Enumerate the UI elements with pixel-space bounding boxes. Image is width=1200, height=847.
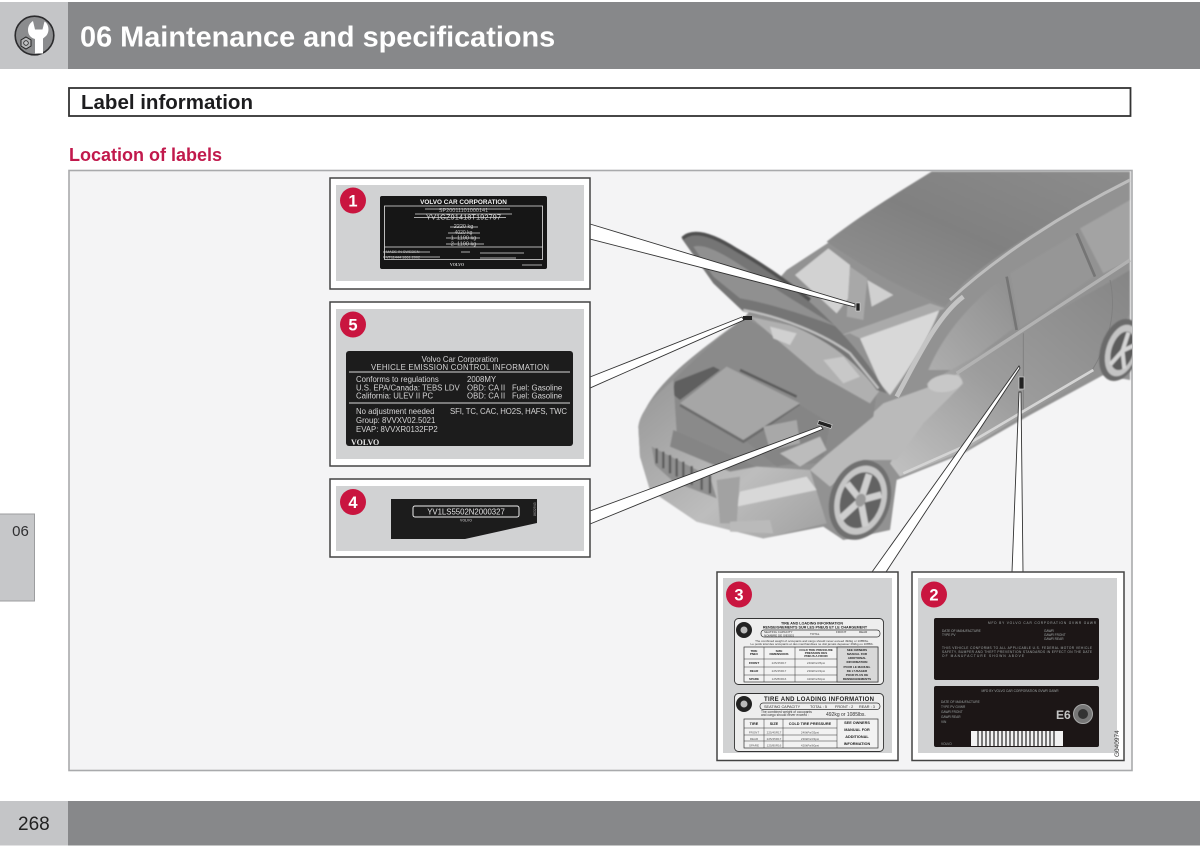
badge 1	[340, 188, 366, 214]
tire label (bilingual): 125/80R16	[772, 677, 787, 681]
vehicle label plate: 2220 kg	[454, 224, 473, 230]
badge 5	[340, 312, 366, 338]
panel: label 3	[717, 572, 898, 760]
page footer band	[0, 801, 1200, 846]
side tab	[0, 514, 34, 601]
badge 5: 5	[348, 316, 358, 334]
VIN plate	[391, 499, 537, 539]
tire label (English): 492kg or 1085lbs.	[826, 712, 866, 718]
badge 4	[340, 489, 366, 515]
side tab: 06	[12, 523, 29, 540]
location marker: label 4	[818, 420, 832, 429]
tire label (bilingual): RENSEIGNEMENTS	[843, 677, 871, 681]
tire label (English): TIRE	[750, 722, 759, 726]
tire label (English): The combined weight of occupants	[761, 710, 812, 714]
illustration code: G040974	[1114, 730, 1121, 757]
VIN plate: VOLVO	[460, 518, 472, 522]
emission label plate: OBD: CA II	[467, 384, 505, 392]
location marker: label 5	[743, 316, 752, 320]
tire label (English): REAR	[750, 737, 759, 741]
tire label (English): 125/80R16	[767, 744, 782, 748]
tire label (bilingual): TOTAL	[810, 632, 820, 636]
car illustration	[638, 172, 1148, 548]
emission label plate: SFI, TC, CAC, HO2S, HAFS, TWC	[450, 407, 567, 416]
barcode plate: MFD BY VOLVO CAR CORPORATION GVWR GAWR	[981, 689, 1059, 693]
certification plate: THIS VEHICLE CONFORMS TO ALL APPLICABLE U.S. FEDERAL MOTOR VEHICLE	[942, 646, 1092, 650]
emission label plate: Group: 8VVXV02.5021	[356, 416, 435, 425]
panel: label 4	[330, 479, 590, 557]
badge 3: 3	[734, 586, 744, 604]
tire label (English): ADDITIONAL	[845, 735, 869, 739]
badge 3	[726, 582, 752, 608]
emission label plate: OBD: CA II	[467, 392, 505, 400]
tire label (bilingual): SEE OWNERS	[847, 648, 867, 652]
emission label plate: EVAP: 8VVXR0132FP2	[356, 425, 438, 434]
tire label (bilingual): SEATING CAPACITY	[764, 630, 793, 634]
barcode plate: E6	[1056, 708, 1071, 722]
tire label (bilingual): SPARE	[749, 677, 759, 681]
tire label (bilingual): DIMENSIONS	[769, 652, 789, 656]
tire label (bilingual): NOMBRE DE SIEGES	[764, 633, 794, 637]
panel: label 1	[330, 178, 590, 289]
vehicle label plate	[380, 196, 547, 269]
tire label (English)	[734, 694, 884, 752]
emission label plate: 2008MY	[467, 375, 497, 384]
tire label (English): SIZE	[770, 722, 779, 726]
tire label (English): 230kPa/33psi	[801, 737, 819, 741]
vehicle label plate: VT11444 1661 2002	[386, 256, 420, 260]
tire label (bilingual): DE L'USAGER	[847, 669, 868, 673]
barcode plate: DATE OF MANUFACTURE	[941, 700, 980, 704]
tire label (bilingual): SIZE	[776, 649, 782, 653]
emission label plate: VOLVO	[351, 438, 379, 447]
leader line: label 2	[1012, 392, 1023, 572]
vehicle label plate: 2- 1190 kg	[451, 242, 476, 248]
certification plate: DATE OF MANUFACTURE	[942, 629, 981, 633]
certification plate	[934, 618, 1099, 680]
tire label (bilingual): The combined weight of occupants and cargo should never exceed 492kg or 1085lbs.	[755, 639, 869, 643]
section heading box: Label information	[81, 91, 253, 114]
tire label (bilingual): TIRE AND LOADING INFORMATION	[781, 622, 843, 626]
icon: wrench and nut	[15, 16, 54, 55]
tire label (English): COLD TIRE PRESSURE	[789, 722, 832, 726]
page header band	[0, 2, 1200, 69]
barcode plate: TYPE PV GVWR	[941, 705, 966, 709]
tire label (English): TOTAL : 5	[810, 705, 827, 709]
vehicle label plate: VOLVO	[450, 262, 464, 267]
tire label (English): SEATING CAPACITY	[764, 705, 801, 709]
tire label (bilingual): INFORMATION	[847, 660, 867, 664]
emission label plate: Fuel: Gasoline	[512, 384, 562, 392]
emission label plate: VEHICLE EMISSION CONTROL INFORMATION	[371, 363, 549, 372]
vehicle label plate: 1- 1190 kg	[451, 236, 476, 242]
tire label (English): 240kPa/35psi	[801, 730, 819, 734]
front wheel	[828, 460, 892, 541]
roof rail and door lines	[897, 180, 1130, 473]
car body base	[638, 172, 1130, 540]
vehicle label plate: VOLVO CAR CORPORATION	[420, 199, 507, 206]
vehicle label plate: YV1GZ91418T192797	[426, 212, 501, 222]
tire label (bilingual): RENSEIGNEMENTS SUR LES PNEUS ET LE CHARGEMENT	[763, 626, 868, 630]
tire label (bilingual): PNEU	[750, 652, 758, 656]
tire label (bilingual): 240kPa/35psi	[807, 661, 825, 665]
tire label (bilingual): COLD TIRE PRESSURE	[799, 648, 833, 652]
barcode plate: VIN	[941, 720, 947, 724]
badge 2: 2	[929, 586, 939, 604]
barcode plate: GAWR FRONT	[941, 710, 963, 714]
panel: label 5	[330, 302, 590, 466]
tire label (English): FRONT	[749, 730, 759, 734]
title: 06 Maintenance and specifications	[80, 22, 555, 54]
emission label plate: California: ULEV II PC	[356, 392, 434, 400]
tire label (bilingual): FRONT	[749, 661, 759, 665]
section heading box	[69, 88, 1130, 116]
vehicle label plate: MADE IN SWEDEN	[386, 250, 420, 254]
leader line: label 1	[590, 224, 855, 307]
tire label (English): 225/45R17	[767, 737, 782, 741]
tire label (bilingual): REAR	[750, 669, 759, 673]
certification plate: SAFETY, BUMPER AND THEFT PREVENTION STANDARDS IN EFFECT ON THE DATE	[942, 650, 1092, 654]
panel: diagram background	[69, 170, 1132, 770]
badge 4: 4	[348, 494, 358, 512]
VIN plate: 8632943	[533, 502, 537, 516]
leader line: label 3	[872, 366, 1020, 572]
panel: label 2	[912, 572, 1124, 760]
badge 2	[921, 582, 947, 608]
tire label (English): and cargo should never exceed :	[761, 713, 809, 717]
barcode plate	[934, 686, 1099, 747]
emission label plate: No adjustment needed	[356, 407, 434, 416]
tire label (bilingual): POUR LE MANUEL	[844, 665, 871, 669]
badge 1: 1	[348, 192, 358, 210]
tire label (bilingual): ADDITIONAL	[848, 656, 866, 660]
tire label (English): REAR : 3	[859, 705, 875, 709]
tire label (English): SPARE	[749, 744, 759, 748]
emission label plate	[346, 351, 573, 447]
barcode plate: GAWR REAR	[941, 715, 961, 719]
tire label (English): 420kPa/60psi	[801, 744, 819, 748]
tire label (English): TIRE AND LOADING INFORMATION	[764, 697, 874, 703]
tire label (bilingual): MANUAL FOR	[847, 652, 868, 656]
tire label (bilingual): POUR PLUS DE	[846, 673, 868, 677]
certification plate: TYPE PV	[942, 633, 956, 637]
certification plate: OF MANUFACTURE SHOWN ABOVE	[942, 654, 1024, 658]
subheading: Location of labels	[69, 145, 222, 165]
certification plate: GAWR REAR	[1044, 637, 1064, 641]
rear wheel	[1098, 318, 1132, 382]
emission label plate: Fuel: Gasoline	[512, 392, 562, 400]
tire label (bilingual): Le poids total des occupants et des marchandises ne doit jamais depasser 492kg ou 1085lb.	[751, 642, 874, 646]
certification plate: GAWR	[1044, 629, 1054, 633]
emission label plate: U.S. EPA/Canada: TEBS LDV	[356, 384, 461, 392]
tire label (bilingual): REAR	[859, 630, 868, 634]
tire label (English): MANUAL FOR	[844, 728, 870, 732]
leader line: label 5	[590, 317, 744, 388]
tire label (bilingual): 230kPa/33psi	[807, 669, 825, 673]
tire label (bilingual): 225/45R17	[772, 669, 787, 673]
tire label (bilingual): PNEUS A FROID	[804, 654, 828, 658]
vehicle label plate: SP20011101000141	[439, 208, 488, 214]
tire label (bilingual)	[734, 618, 884, 684]
emission label plate: Conforms to regulations	[356, 375, 439, 384]
page number: 268	[18, 814, 50, 835]
tire label (English): FRONT : 2	[835, 705, 853, 709]
tire label (bilingual): 225/45R17	[772, 661, 787, 665]
tire label (English): INFORMATION	[844, 742, 871, 746]
tire label (English): SEE OWNERS	[844, 721, 870, 725]
vehicle label plate: 4020 kg	[455, 230, 473, 236]
certification plate: MFD BY VOLVO CAR CORPORATION GVWR GAWR	[988, 621, 1097, 625]
leader line: label 4	[590, 426, 823, 524]
location marker: label 2	[1019, 377, 1024, 389]
VIN plate: YV1LS5502N2000327	[427, 508, 505, 516]
tire label (English): 225/45R17	[767, 730, 782, 734]
emission label plate: Volvo Car Corporation	[422, 355, 498, 364]
certification plate: GAWR FRONT	[1044, 633, 1066, 637]
barcode plate: VOLVO	[941, 742, 952, 746]
tire label (bilingual): PRESSION DES	[805, 651, 827, 655]
location marker: label 1	[856, 303, 860, 311]
tire label (bilingual): TIRE	[751, 649, 757, 653]
tire label (bilingual): FRONT	[836, 630, 846, 634]
tire label (bilingual): 420kPa/60psi	[807, 677, 825, 681]
